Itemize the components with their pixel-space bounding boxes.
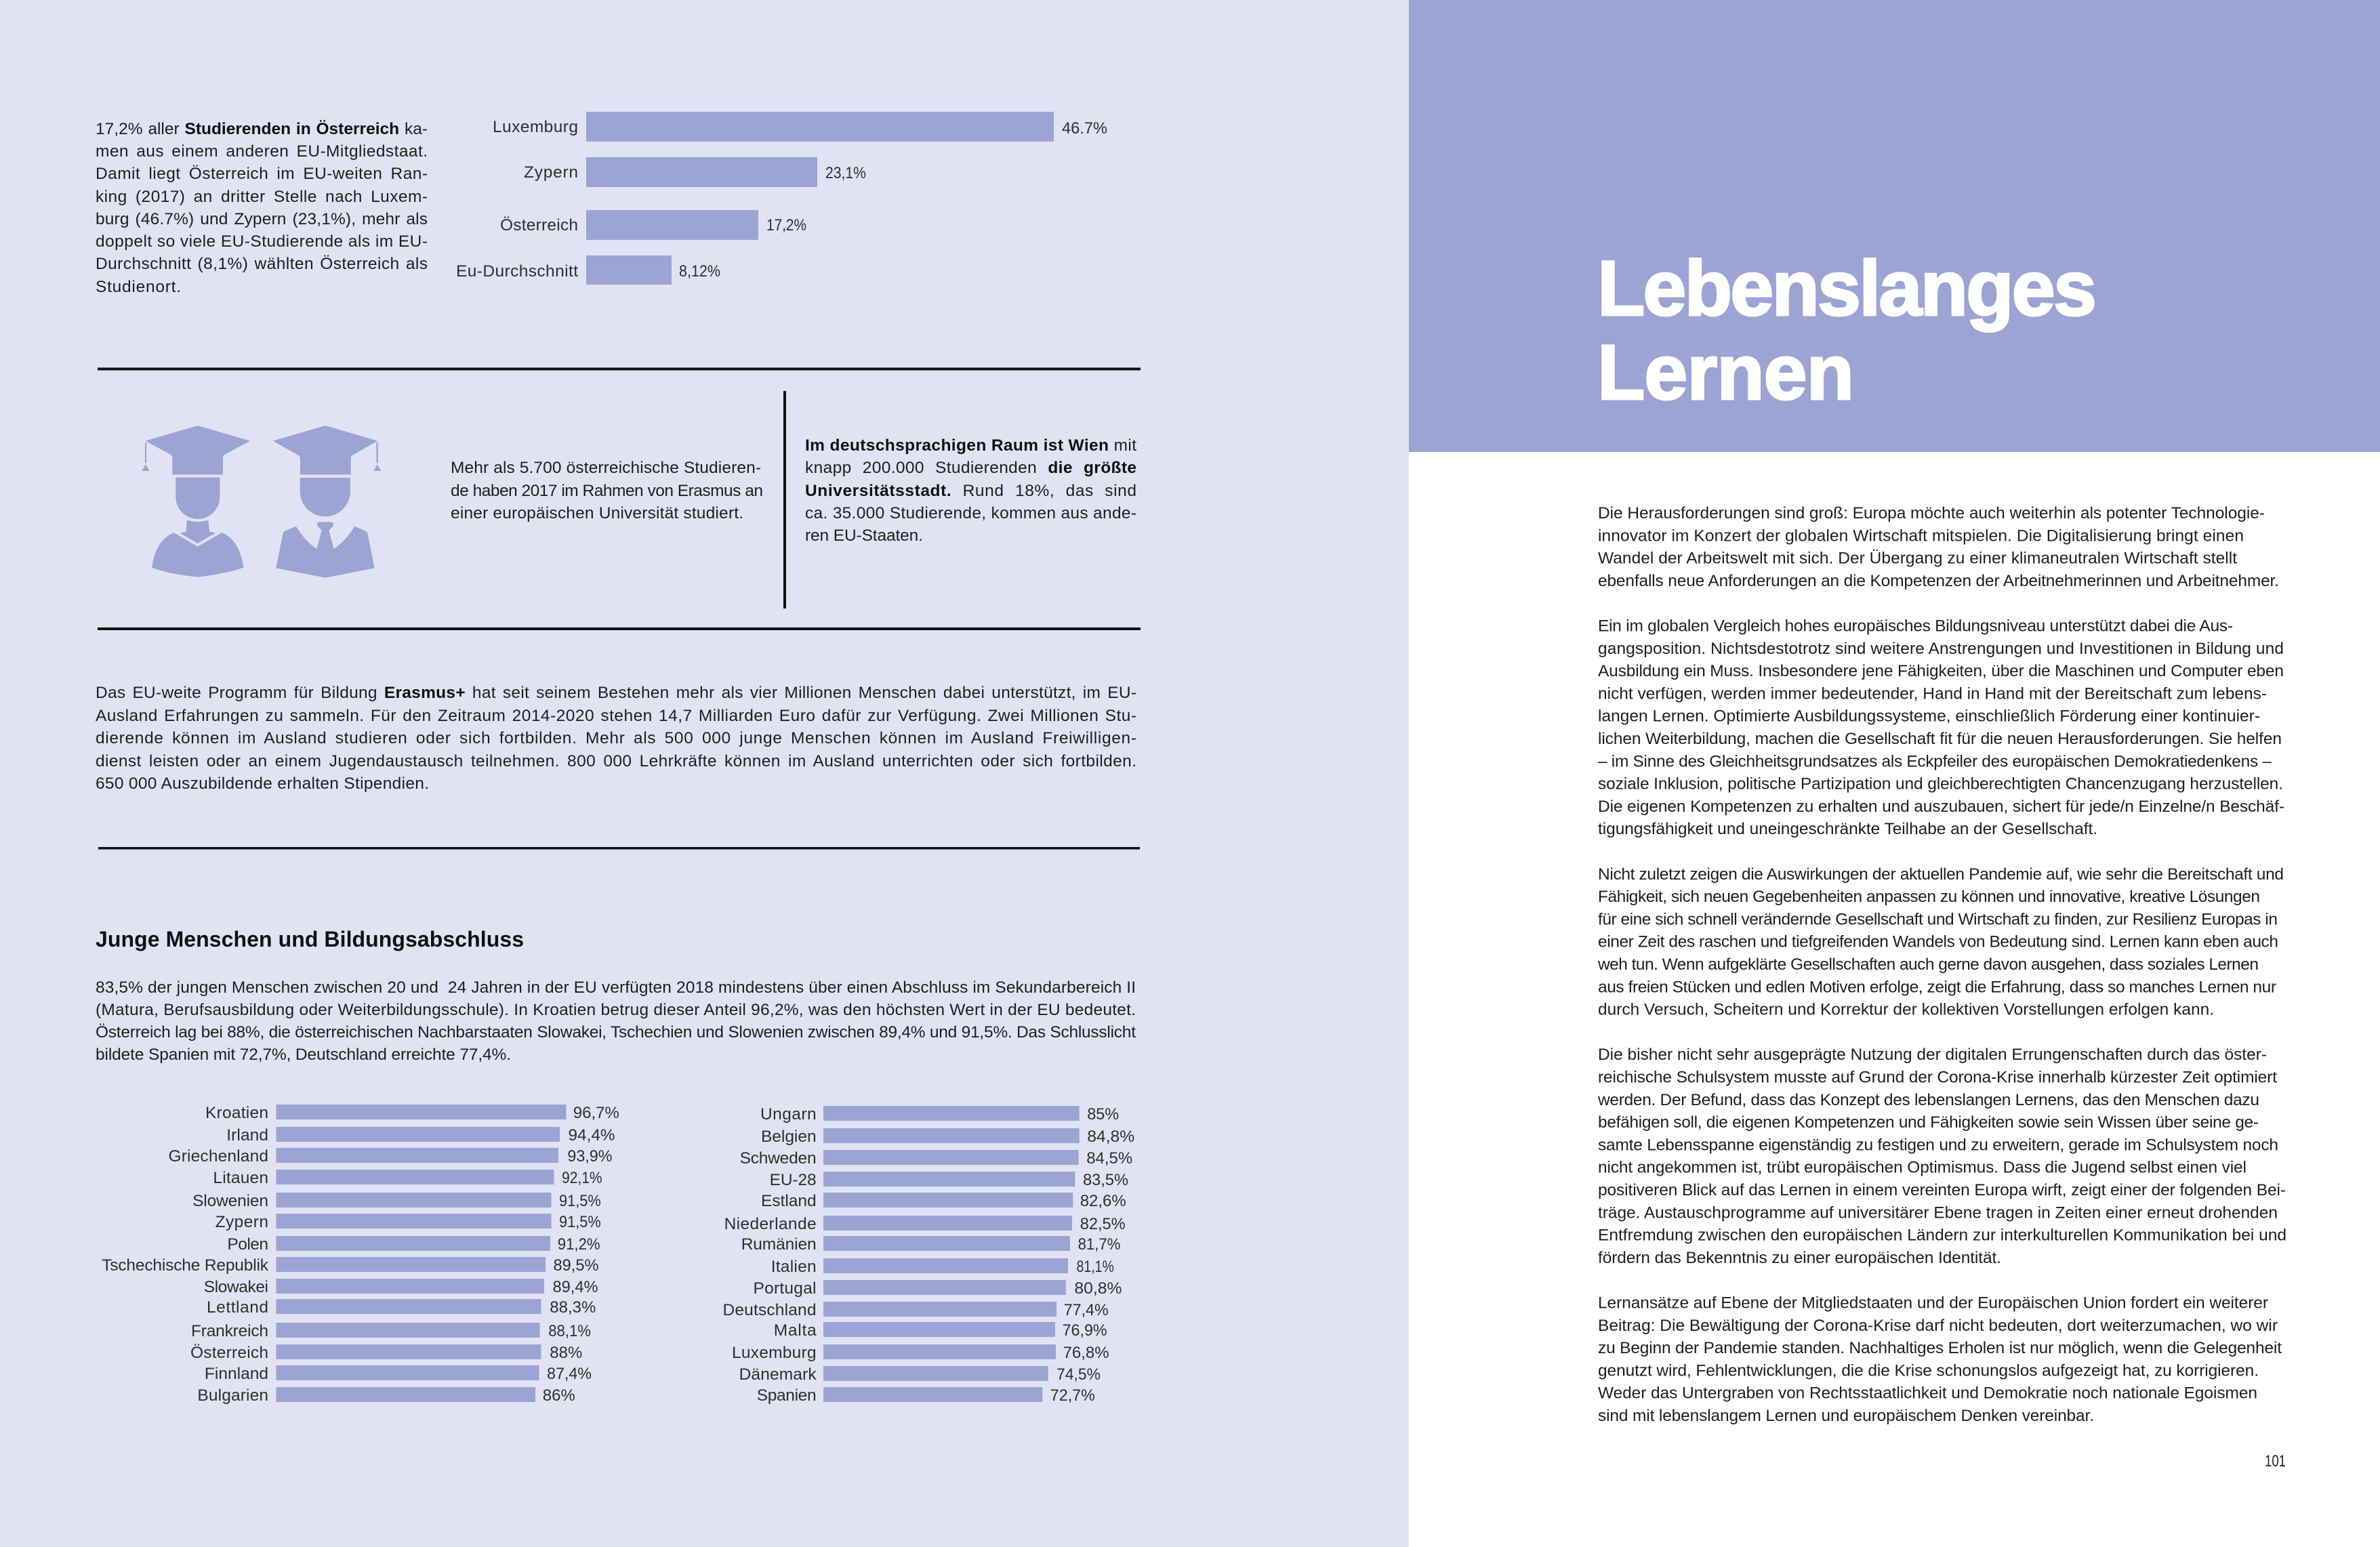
panel: Austria student share intro text: doppelt so viele EU-Studierende als im EU- <box>96 232 428 251</box>
text block: Erasmus+ programme <box>96 684 1136 793</box>
left page background <box>0 0 1409 1547</box>
bar chart: secondary attainment, right column: Ungarn <box>760 1105 817 1123</box>
bar chart: secondary attainment, left column: Bulgarien <box>197 1386 268 1405</box>
bar chart: secondary attainment, right column: Deutschland <box>722 1301 816 1319</box>
bar chart: secondary attainment, right column: Portugal <box>754 1279 816 1298</box>
bar chart: secondary attainment, right column: 72,7% <box>1050 1386 1095 1405</box>
bar chart: secondary attainment, left column: 92,1% <box>562 1169 602 1187</box>
bar chart: secondary attainment, right column: 81,1% <box>1076 1258 1114 1276</box>
text block: article body: soziale Inklusion, politische Partizipation und gleichberechtigten Chancenzugang herzustellen. <box>1598 775 2283 793</box>
text block: article body: gangsposition. Nichtsdestotrotz sind weitere Anstrengungen und Investitionen in Bildung und <box>1598 640 2284 658</box>
text block: article body: Ein im globalen Vergleich hohes europäisches Bildungsniveau unterstützt dabei die Aus- <box>1598 617 2233 636</box>
text block: article body <box>1597 504 2286 1425</box>
bar chart: secondary attainment, left column: 88,1% <box>548 1322 591 1340</box>
panel: Austria student share intro text <box>96 120 428 296</box>
bar chart: secondary attainment, right column: Dänemark <box>739 1365 817 1384</box>
text block: article body: innovator im Konzert der globalen Wirtschaft mitspielen. Die Digitalisierung bringt einen <box>1598 527 2244 545</box>
text block: article body: sind mit lebenslangem Lernen und europäischem Denken vereinbar. <box>1598 1407 2094 1425</box>
text block: article body: Entfremdung zwischen den europäischen Ländern zur interkulturellen Kommunikation bei und <box>1598 1226 2286 1245</box>
text block: article body: befähigen soll, die eigenen Kompetenzen und Fähigkeiten sowie sein Wissen über seine ge- <box>1598 1113 2259 1132</box>
divider <box>98 627 1141 630</box>
bar chart: secondary attainment, left column: Slowakei <box>204 1278 268 1296</box>
bar chart: secondary attainment, left column: Finnland <box>205 1365 268 1383</box>
bar chart: secondary attainment, left column: 96,7% <box>573 1104 619 1122</box>
bar chart: secondary attainment, right column: Malta <box>774 1321 817 1340</box>
bar chart: secondary attainment, left column: Griechenland <box>168 1147 268 1166</box>
heading: young people: Junge Menschen und Bildungsabschluss <box>96 927 524 951</box>
bar chart: secondary attainment, left column: 89,5% <box>553 1256 599 1275</box>
text block: article body: Ausbildung ein Muss. Insbesondere jene Fähigkeiten, über die Maschinen und Computer eben <box>1598 662 2284 680</box>
bar chart: EU students by country: Österreich <box>500 216 578 234</box>
bar chart: secondary attainment, left column: 89,4% <box>553 1278 598 1296</box>
page number: 101 <box>2265 1452 2286 1470</box>
text block: Wien: ren EU-Staaten. <box>805 527 923 545</box>
bar chart: secondary attainment, right column: Estland <box>761 1192 817 1210</box>
bar chart: EU students by country <box>456 112 1107 285</box>
text block: article body: fördern das Bekenntnis zu einer europäischen Identität. <box>1598 1249 2001 1267</box>
bar chart: secondary attainment, left column: Polen <box>227 1235 268 1254</box>
bar chart: secondary attainment, left column: 87,4% <box>547 1365 592 1383</box>
bar chart: EU students by country: Luxemburg <box>493 118 578 136</box>
bar chart: secondary attainment, right column: 84,5% <box>1086 1149 1132 1168</box>
bar chart: secondary attainment, right column: Italien <box>771 1258 817 1276</box>
bar chart: secondary attainment, right column: Luxemburg <box>732 1344 816 1362</box>
bar chart: secondary attainment, left column: 91,2% <box>558 1235 600 1254</box>
panel: Austria student share intro text: Damit liegt Österreich im EU-weiten Ran- <box>96 165 428 183</box>
text block: Wien: ca. 35.000 Studierende, kommen aus ande- <box>805 504 1136 522</box>
text block: article body: tigungsfähigkeit und uneingeschränkte Teilhabe an der Gesellschaft. <box>1598 820 2097 838</box>
text block: article body: Wandel der Arbeitswelt mit sich. Der Übergang zu einer klimaneutralen Wirtschaft stellt <box>1598 550 2237 568</box>
bar chart: secondary attainment, right column: 84,8% <box>1087 1128 1134 1146</box>
text block: article body: nicht verfügen, werden immer bedeutender, Hand in Hand mit der Bereitschaft zum lebens- <box>1598 684 2267 703</box>
bar chart: secondary attainment, right column: Belgien <box>761 1128 817 1146</box>
bar chart: secondary attainment, right column: 85% <box>1087 1105 1119 1123</box>
bar chart: secondary attainment, right column: 81,7% <box>1078 1235 1120 1254</box>
text block: Wien: Universitätsstadt. Rund 18%, das sind <box>805 482 1136 500</box>
text block: article body: aus freien Stücken und edlen Motiven erfolge, zeigt die Erfahrung, dass so manches Lernen nur <box>1598 978 2276 996</box>
bar chart: secondary attainment, right column: 77,4% <box>1064 1301 1109 1319</box>
bar chart: secondary attainment, left column <box>102 1104 619 1405</box>
text block: article body: weh tun. Wenn aufgeklärte Gesellschaften auch gerne davon ausgehen, dass soziales Lernen <box>1597 955 2259 974</box>
text block: article body: Fähigkeit, sich neuen Gegebenheiten anpassen zu können und innovative, kreative Lösungen <box>1598 888 2260 906</box>
bar chart: secondary attainment, left column: Tschechische Republik <box>102 1256 269 1275</box>
panel: Austria student share intro text: burg (46.7%) und Zypern (23,1%), mehr als <box>96 210 428 228</box>
text block: young people: Österreich lag bei 88%, die österreichischen Nachbarstaaten Slowakei, Tschechien und Slowenien zwischen 89,4% und 91,5%. Das Schlusslicht <box>96 1023 1136 1041</box>
divider <box>783 391 786 609</box>
bar chart: secondary attainment, right column: Spanien <box>757 1386 817 1405</box>
text block: Erasmus students <box>451 459 763 522</box>
bar chart: EU students by country: 17,2% <box>766 216 806 234</box>
bar chart: secondary attainment, left column: Slowenien <box>192 1192 268 1210</box>
bar chart: secondary attainment, right column: 83,5% <box>1083 1171 1128 1189</box>
bar chart: secondary attainment, left column: Kroatien <box>205 1104 268 1122</box>
bar chart: EU students by country: Eu-Durchschnitt <box>456 262 578 281</box>
text block: article body: Die Herausforderungen sind groß: Europa möchte auch weiterhin als potenter Technologie- <box>1598 504 2265 522</box>
text block: Wien <box>805 436 1136 545</box>
right page background <box>1409 0 2380 1547</box>
text block: article body: – im Sinne des Gleichheitsgrundsatzes als Eckpfeiler des europäischen Demokratiedenkens – <box>1598 752 2272 770</box>
bar chart: secondary attainment, left column: 88% <box>550 1344 582 1362</box>
bar chart: EU students by country: 8,12% <box>679 262 720 281</box>
bar chart: secondary attainment, right column: 76,8% <box>1063 1344 1109 1362</box>
panel: title band <box>1409 0 2380 452</box>
bar chart: secondary attainment, left column: Zypern <box>216 1213 268 1231</box>
divider <box>98 847 1140 850</box>
text block: young people: (Matura, Berufsausbildung oder Weiterbildungsschule). In Kroatien betrug dieser Anteil 96,2%, was den höchsten Wert in der EU bedeutet. <box>96 1001 1136 1019</box>
text block: article body: nicht angekommen ist, trübt europäischen Optimismus. Dass die Jugend selbst einen viel <box>1598 1159 2246 1177</box>
text block: Erasmus+ programme: Ausland Erfahrungen zu sammeln. Für den Zeitraum 2014-2020 stehen 14,7 Milliarden Euro dafür zur Verfügung. Zwei Millionen Stu- <box>96 707 1136 725</box>
bar chart: secondary attainment, left column: 91,5% <box>559 1213 601 1231</box>
text block: Erasmus students: einer europäischen Universität studiert. <box>451 504 743 522</box>
title: Lebenslanges <box>1597 245 2097 332</box>
bar chart: secondary attainment, right column <box>722 1105 1134 1405</box>
title: Lernen <box>1597 329 1854 416</box>
text block: article body: samte Lebensspanne eigenständig zu festigen und zu erweitern, gerade im Schulsystem noch <box>1598 1136 2278 1154</box>
text block: article body: positiveren Blick auf das Lernen in einem vereinten Europa wirft, zeigt einer der folgenden Bei- <box>1598 1181 2286 1199</box>
text block: article body: Weder das Untergraben von Rechtsstaatlichkeit und Demokratie noch nationale Egoismen <box>1598 1384 2257 1403</box>
bar chart: secondary attainment, right column: 80,8% <box>1074 1279 1122 1298</box>
title <box>1597 245 2097 416</box>
text block: article body: für eine sich schnell verändernde Gesellschaft und Wirtschaft zu finden, zur Resilienz Europas in <box>1598 910 2278 928</box>
text block: Erasmus+ programme: Das EU-weite Programm für Bildung Erasmus+ hat seit seinem Bestehen mehr als vier Millionen Menschen dabei unterstützt, im EU- <box>96 684 1136 702</box>
text block: article body: einer Zeit des raschen und tiefgreifenden Wandels von Bedeutung sind. Lernen kann eben auch <box>1598 933 2278 951</box>
bar chart: secondary attainment, left column: 93,9% <box>567 1147 612 1166</box>
text block: article body: lichen Weiterbildung, machen die Gesellschaft fit für die neuen Herausforderungen. Sie helfen <box>1598 730 2282 748</box>
bar chart: secondary attainment, left column: Irland <box>226 1126 268 1144</box>
bar chart: EU students by country: Zypern <box>524 163 578 182</box>
bar chart: secondary attainment, right column: Schweden <box>740 1149 817 1168</box>
bar chart: secondary attainment, right column: 76,9% <box>1063 1321 1107 1340</box>
text block: young people: 83,5% der jungen Menschen zwischen 20 und 24 Jahren in der EU verfügten 2018 mindestens über einen Abschluss im Sekundarbereich II <box>96 978 1136 997</box>
panel: Austria student share intro text: Durchschnitt (8,1%) wählten Österreich als <box>96 255 428 273</box>
bar chart: secondary attainment, left column: 94,4% <box>568 1126 615 1144</box>
text block: Erasmus+ programme: dierende können im Ausland studieren oder sich fortbilden. Mehr als 500 000 junge Menschen können im Ausland Freiwilligen- <box>96 729 1136 747</box>
text block: Erasmus students: de haben 2017 im Rahmen von Erasmus an <box>451 482 763 500</box>
text block: Wien: knapp 200.000 Studierenden die größte <box>805 459 1136 477</box>
bar chart: secondary attainment, left column: Österreich <box>190 1344 268 1362</box>
text block: article body: reichische Schulsystem musste auf Grund der Corona-Krise innerhalb kürzester Zeit optimiert <box>1598 1068 2277 1087</box>
text block: article body: ebenfalls neue Anforderungen an die Kompetenzen der Arbeitnehmerinnen und Arbeitnehmer. <box>1598 572 2279 590</box>
bar chart: secondary attainment, right column: 74,5% <box>1056 1365 1101 1384</box>
text block: young people <box>96 978 1136 1064</box>
text block: article body: werden. Der Befund, dass das Konzept des lebenslangen Lernens, das den Menschen dazu <box>1597 1091 2259 1109</box>
text block: Wien: Im deutschsprachigen Raum ist Wien mit <box>805 436 1136 455</box>
text block: article body: Nicht zuletzt zeigen die Auswirkungen der aktuellen Pandemie auf, wie sehr die Bereitschaft und <box>1598 865 2284 884</box>
divider <box>98 367 1141 370</box>
bar chart: secondary attainment, right column: 82,6% <box>1080 1192 1126 1210</box>
text block: article body: zu Beginn der Pandemie standen. Nachhaltiges Erholen ist nur möglich, wenn die Gelegenheit <box>1598 1339 2282 1357</box>
bar chart: secondary attainment, right column: Niederlande <box>724 1215 817 1233</box>
text block: Erasmus+ programme: dienst leisten oder an einem Jugendaustausch teilnehmen. 800 000 Lehrkräfte können im Ausland unterrichten oder sich fortbilden. <box>96 752 1136 770</box>
text block: Erasmus+ programme: 650 000 Auszubildende erhalten Stipendien. <box>96 775 429 793</box>
text block: article body: Die bisher nicht sehr ausgeprägte Nutzung der digitalen Errungenschaften durch das öster- <box>1598 1046 2267 1064</box>
text block: article body: träge. Austauschprogramme auf universitärer Ebene tragen in Zeiten einer erneut drohenden <box>1598 1203 2278 1222</box>
panel: Austria student share intro text: king (2017) an dritter Stelle nach Luxem- <box>96 188 428 206</box>
bar chart: secondary attainment, left column: 91,5% <box>559 1192 601 1210</box>
text block: article body: durch Versuch, Scheitern und Korrektur der kollektiven Vorstellungen erfolgen kann. <box>1598 1001 2214 1019</box>
panel: Austria student share intro text: Studienort. <box>96 278 181 296</box>
bar chart: secondary attainment, right column: EU-28 <box>770 1171 817 1189</box>
bar chart: secondary attainment, left column: Frankreich <box>191 1322 268 1340</box>
bar chart: secondary attainment, right column: 82,5% <box>1080 1215 1126 1233</box>
bar chart: secondary attainment, left column: 88,3% <box>550 1298 596 1317</box>
text block: article body: langen Lernen. Optimierte Ausbildungssysteme, einschließlich Förderung einer kontinuier- <box>1598 707 2260 726</box>
text block: article body: Lernansätze auf Ebene der Mitgliedstaaten und der Europäischen Union fordert ein weiterer <box>1598 1294 2268 1312</box>
bar chart: EU students by country: 46.7% <box>1062 119 1107 138</box>
bar chart: secondary attainment, right column: Rumänien <box>741 1235 817 1254</box>
text block: article body: genutzt wird, Fehlentwicklungen, die die Krise schonungslos aufgezeigt hat, zu korrigieren. <box>1598 1361 2259 1380</box>
text block: article body: Die eigenen Kompetenzen zu erhalten und auszubauen, sichert für jede/n Einzelne/n Beschäf- <box>1598 798 2284 816</box>
panel: Austria student share intro text: men aus einem anderen EU-Mitgliedstaat. <box>96 142 428 161</box>
icon: two graduates <box>142 426 381 578</box>
bar chart: secondary attainment, left column: Lettland <box>207 1298 268 1317</box>
text block: young people: bildete Spanien mit 72,7%, Deutschland erreichte 77,4%. <box>96 1046 511 1064</box>
bar chart: EU students by country: 23,1% <box>825 164 866 182</box>
text block: Erasmus students: Mehr als 5.700 österreichische Studieren- <box>451 459 761 477</box>
bar chart: secondary attainment, left column: 86% <box>543 1386 575 1405</box>
panel: Austria student share intro text: 17,2% aller Studierenden in Österreich ka- <box>96 120 428 138</box>
bar chart: secondary attainment, left column: Litauen <box>213 1169 268 1187</box>
text block: article body: Beitrag: Die Bewältigung der Corona-Krise darf nicht bedeuten, dort weiterzumachen, wo wir <box>1598 1317 2278 1335</box>
